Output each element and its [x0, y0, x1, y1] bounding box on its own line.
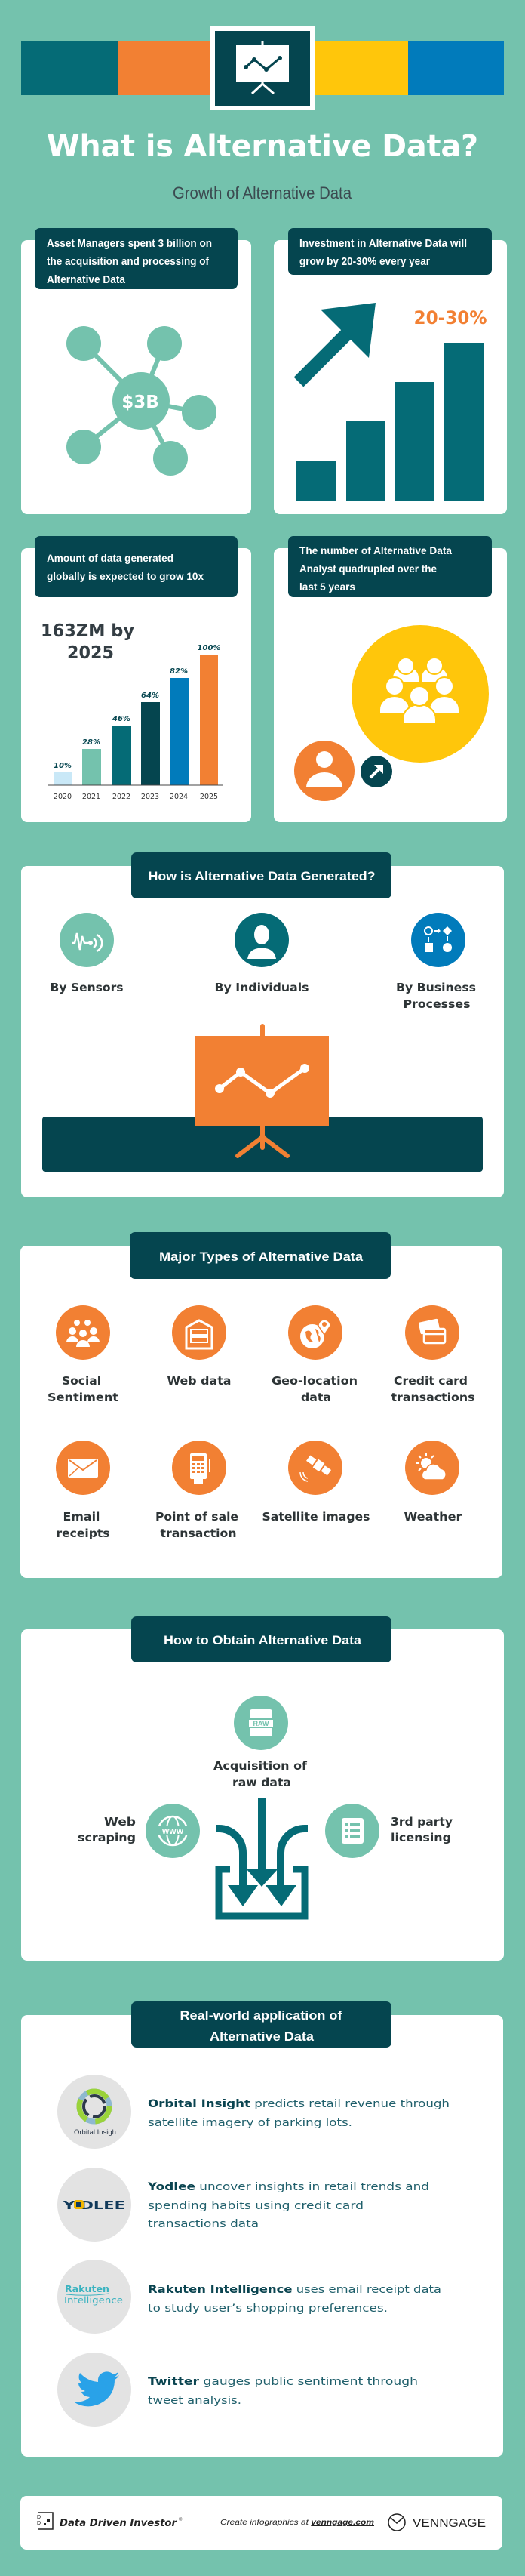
section heading: How is Alternative Data Generated?	[148, 869, 376, 883]
label: geo-location data: Geo-location	[272, 1374, 358, 1388]
label: 3rd party licensing: licensing	[391, 1831, 451, 1844]
icon: presentation board	[210, 26, 315, 110]
icon: funnel arrows into box	[216, 1798, 308, 1916]
callout header 3: globally is expected to grow 10x	[47, 570, 204, 582]
icon: web scraping globe	[146, 1804, 200, 1858]
label: by business processes: Processes	[403, 997, 471, 1011]
panel: major types of alternative data	[20, 1232, 502, 1578]
panel: analysts quadrupled	[274, 536, 507, 822]
text: orbital insight: satellite imagery of parking lots.	[148, 2117, 352, 2129]
icon: business processes	[411, 913, 465, 967]
section heading: Major Types of Alternative Data	[159, 1249, 364, 1264]
illustration: presentation board on stage	[42, 1026, 483, 1172]
label: satellite images: Satellite images	[262, 1510, 370, 1524]
logo: rakuten intelligence: Rakuten	[65, 2284, 109, 2294]
stat: 163ZM by 2025: 163ZM by	[41, 621, 134, 641]
icon: satellite	[288, 1441, 342, 1495]
label: 3rd party licensing: 3rd party	[391, 1815, 453, 1829]
panel: real-world application	[21, 2001, 503, 2457]
section heading: Alternative Data	[210, 2029, 315, 2044]
icon: credit card	[405, 1305, 459, 1360]
icon: web data	[172, 1305, 226, 1360]
label: by individuals: By Individuals	[214, 981, 309, 994]
icon: sensors	[60, 913, 114, 967]
subtitle: Growth of Alternative Data	[173, 183, 352, 202]
logo: data driven investor	[37, 2513, 183, 2529]
section heading: How to Obtain Alternative Data	[164, 1633, 362, 1647]
icon: single analyst	[294, 741, 355, 801]
icon: network $3B: $3B	[121, 393, 159, 412]
logo: venngage: VENNGAGE	[413, 2517, 486, 2530]
section heading	[131, 852, 391, 898]
icon: social sentiment	[56, 1305, 110, 1360]
logo: data driven investor: Data Driven Investor	[60, 2518, 178, 2529]
bar chart: yearly growth: 100%	[198, 644, 220, 652]
panel: asset managers $3B	[21, 228, 251, 514]
label: weather: Weather	[404, 1510, 462, 1524]
icon: network $3B	[66, 326, 216, 476]
label: point of sale transaction: Point of sale	[155, 1510, 238, 1524]
callout header 4: last 5 years	[299, 581, 355, 593]
logo: rakuten intelligence	[57, 2260, 131, 2334]
bar chart: yearly growth: 64%	[141, 692, 159, 700]
icon: growth arrow	[361, 756, 392, 787]
panel: how is alternative data generated	[21, 852, 504, 1197]
label: credit card transactions: Credit card	[394, 1374, 468, 1388]
header color bar	[21, 41, 504, 95]
icon: web scraping globe: WWW	[162, 1828, 184, 1836]
label: email receipts: receipts	[56, 1527, 110, 1540]
icon: raw data: RAW	[253, 1720, 269, 1727]
label: web scraping: scraping	[78, 1831, 136, 1844]
label: web scraping: Web	[104, 1815, 136, 1829]
callout header 4: Analyst quadrupled over the	[299, 562, 437, 575]
callout header 1	[35, 228, 238, 289]
bar chart: yearly growth: 28%	[82, 738, 100, 747]
bar chart: yearly growth: 2025	[200, 793, 218, 801]
label: social sentiment: Social	[62, 1374, 101, 1388]
label: web data: Web data	[167, 1374, 231, 1388]
panel: how to obtain alternative data	[21, 1616, 504, 1961]
label: social sentiment: Sentiment	[48, 1391, 118, 1404]
logo: data driven investor: ®	[179, 2517, 183, 2522]
callout header 3	[35, 536, 238, 597]
icon: weather	[405, 1441, 459, 1495]
bar chart: yearly growth: 82%	[170, 667, 188, 676]
logo: venngage	[388, 2514, 486, 2531]
bar chart: yearly growth: 46%	[112, 715, 130, 723]
bar chart: yearly growth: 2023	[141, 793, 159, 801]
text: yodlee: transactions data	[148, 2218, 259, 2230]
callout header 4	[288, 536, 492, 597]
icon: group of analysts	[352, 625, 489, 763]
label: point of sale transaction: transaction	[160, 1527, 237, 1540]
icon: 3rd party licensing	[325, 1804, 379, 1858]
logo: data driven investor: D	[37, 2521, 41, 2526]
logo: orbital insight: Orbital Insigh	[74, 2128, 116, 2137]
panel: investment growth 20-30%	[274, 228, 507, 514]
title: What is Alternative Data?	[47, 129, 478, 164]
stat: 20-30%: 20-30%	[413, 307, 487, 328]
label: acquisition of raw data: raw data	[232, 1776, 291, 1789]
icon: raw data	[234, 1696, 288, 1750]
bar chart: yearly growth: 2024	[170, 793, 188, 801]
bar chart: growth bars with arrow	[296, 303, 484, 501]
text: yodlee: Yodlee uncover insights in retail trends and	[148, 2181, 397, 2193]
label: credit card transactions: transactions	[391, 1391, 475, 1404]
icon: point of sale	[172, 1441, 226, 1495]
section heading	[130, 1232, 391, 1279]
callout header 3: Amount of data generated	[47, 552, 173, 564]
logo: rakuten intelligence: Intelligence	[64, 2295, 123, 2306]
bar chart: yearly growth: 10%	[54, 762, 72, 770]
label: geo-location data: data	[301, 1391, 331, 1404]
logo: yodlee	[57, 2168, 131, 2242]
callout header 2: Investment in Alternative Data will	[299, 237, 467, 250]
text: rakuten: Rakuten Intelligence uses email receipt data	[148, 2284, 424, 2296]
section heading	[131, 2001, 391, 2048]
logo: yodlee: Y DLEE	[63, 2199, 125, 2212]
footer	[20, 2496, 502, 2550]
section heading: Real-world application of	[180, 2008, 342, 2023]
text: orbital insight: Orbital Insight predicts retail revenue through	[148, 2098, 424, 2110]
callout header 1: Alternative Data	[47, 273, 126, 286]
panel: data generated 163ZM	[21, 536, 251, 822]
callout header 2	[288, 228, 492, 275]
text: rakuten: to study user’s shopping preferences.	[148, 2303, 388, 2315]
icon: individuals	[235, 913, 289, 967]
callout header 4: The number of Alternative Data	[299, 544, 452, 556]
bar chart: yearly growth	[48, 644, 223, 801]
text: twitter: Twitter gauges public sentiment through	[148, 2376, 384, 2388]
label: by business processes: By Business	[396, 981, 476, 994]
callout header 2: grow by 20-30% every year	[299, 255, 430, 268]
logo: orbital insight	[57, 2075, 131, 2149]
label: acquisition of raw data: Acquisition of	[213, 1759, 307, 1773]
bar chart: yearly growth: 2022	[112, 793, 130, 801]
text: twitter: tweet analysis.	[148, 2395, 241, 2407]
section heading	[131, 1616, 391, 1662]
icon: geo-location	[288, 1305, 342, 1360]
stat: 163ZM by 2025: 2025	[67, 643, 114, 663]
logo: twitter	[57, 2353, 131, 2427]
bar chart: yearly growth: 2021	[82, 793, 100, 801]
credit: venngage link: Create infographics at venngage.com	[220, 2519, 374, 2527]
bar chart: yearly growth: 2020	[54, 793, 72, 801]
callout header 1: Asset Managers spent 3 billion on	[47, 237, 212, 250]
icon: email receipts	[56, 1441, 110, 1495]
callout header 1: the acquisition and processing of	[47, 255, 210, 268]
label: email receipts: Email	[63, 1510, 100, 1524]
logo: data driven investor: D	[37, 2515, 41, 2520]
label: by sensors: By Sensors	[50, 981, 124, 994]
text: yodlee: spending habits using credit card	[148, 2200, 364, 2212]
